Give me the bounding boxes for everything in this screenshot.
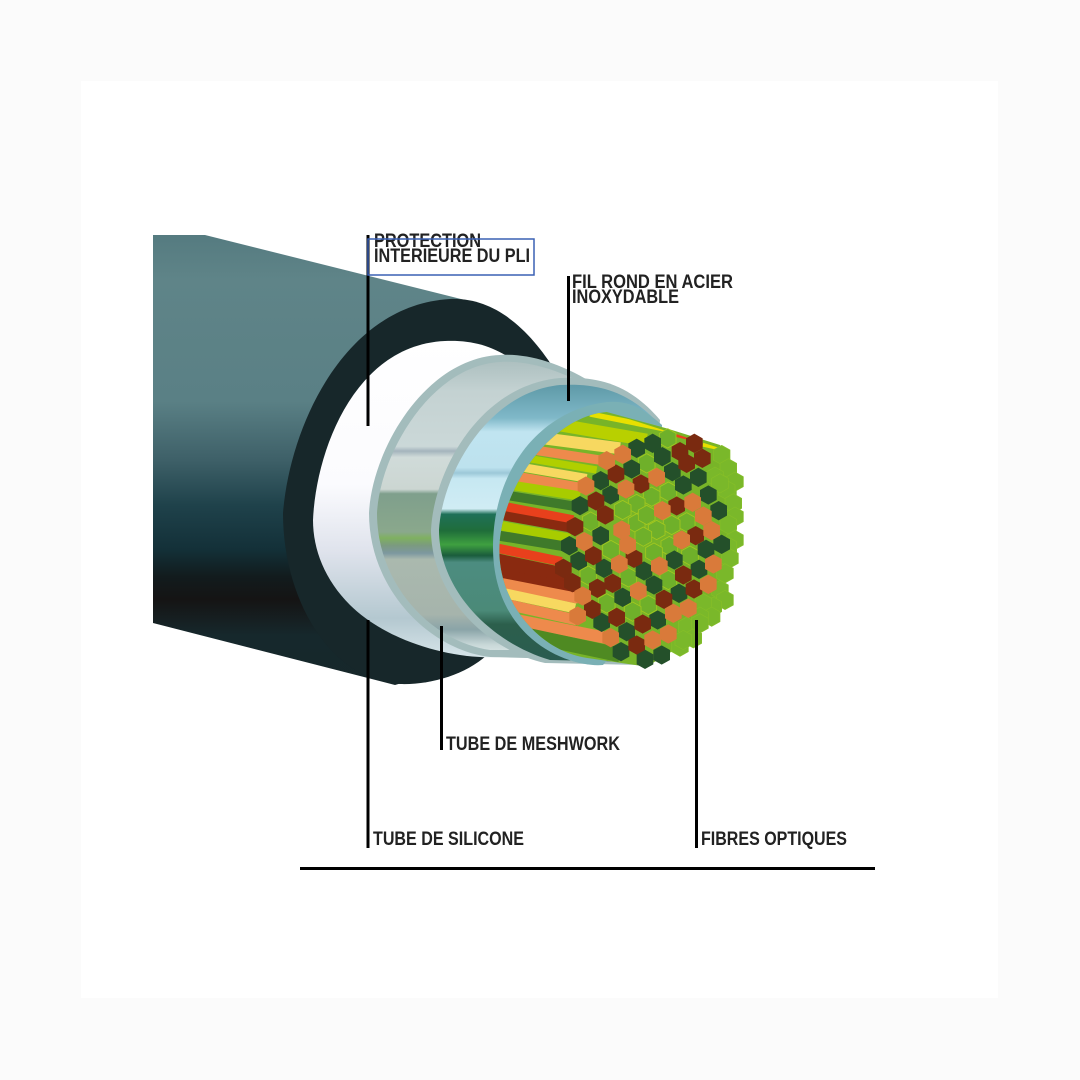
fibre ends: green (580, 429, 698, 621)
fibre ends: orange (569, 445, 722, 650)
leader line: steel wire (567, 276, 570, 401)
black silicone ring (283, 299, 560, 684)
label: fil rond en acier inoxydable: INOXYDABLE (572, 287, 679, 308)
leader line: meshwork tube (440, 626, 443, 750)
teal end rim (493, 402, 662, 665)
label: tube de silicone: TUBE DE SILICONE (373, 829, 524, 850)
selection box (368, 239, 534, 275)
infographic canvas (153, 234, 875, 870)
fibre ends: brown-red (555, 434, 711, 655)
label: protection intérieure du pli (374, 231, 530, 267)
stainless steel tube (439, 385, 660, 662)
label: fil rond en acier inoxydable: FIL ROND EN ACIER (572, 272, 733, 293)
label: protection intérieure du pli: INTERIEURE DU PLI (374, 246, 530, 267)
white inner protection layer (313, 341, 510, 657)
outer jacket (153, 235, 500, 685)
leader line: optical fibres (695, 620, 698, 848)
label: tube de meshwork: TUBE DE MESHWORK (446, 734, 620, 755)
label: fibres optiques: FIBRES OPTIQUES (701, 829, 847, 850)
leader line: silicone tube (366, 620, 370, 848)
label: fil rond en acier inoxydable (572, 272, 733, 308)
baseline rule (300, 867, 875, 870)
cable illustration (153, 235, 743, 685)
meshwork ring band (377, 362, 610, 650)
steel tube rim (431, 378, 660, 665)
leader line: protection upper (366, 235, 370, 426)
label: protection intérieure du pli: PROTECTION (374, 231, 481, 252)
white panel (81, 81, 998, 998)
meshwork ring rim (369, 355, 610, 660)
fibre bundle base (499, 412, 737, 667)
fibre side stripes (495, 414, 722, 655)
fibre ends: dark green (561, 434, 730, 669)
optical fibres bundle (495, 412, 743, 669)
fibre ends: light green edge field (672, 445, 743, 656)
